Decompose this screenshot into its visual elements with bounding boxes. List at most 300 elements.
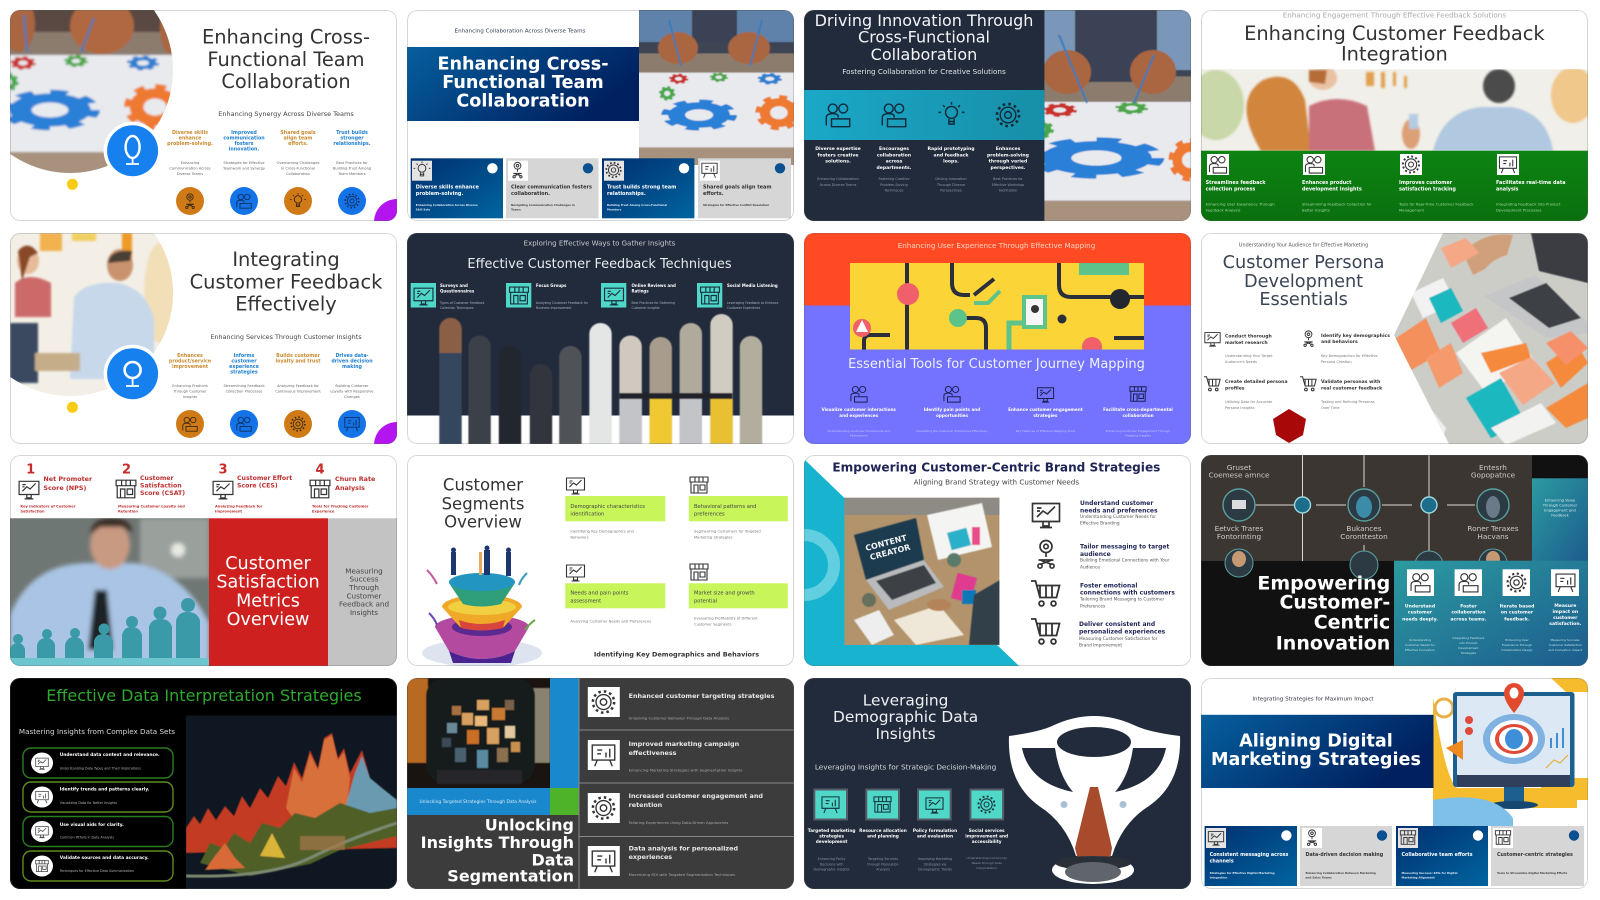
feature 1: Understanding	[1409, 638, 1431, 642]
metric 1: 1	[26, 462, 35, 478]
tile 2	[859, 789, 907, 871]
teal side panel: Feedback	[1551, 514, 1570, 518]
image: finger strips over laptop	[439, 314, 762, 458]
tile 1: Consistent messaging across	[1210, 852, 1289, 858]
heading: Unlocking	[485, 815, 574, 834]
tile 1: development	[816, 838, 847, 844]
bullet headings: fosters	[234, 141, 254, 147]
title band: Marketing Strategies	[1211, 750, 1421, 770]
bullet headings: Trust builds	[336, 130, 368, 136]
technique 4	[697, 282, 778, 310]
metric 4: Analysis	[335, 484, 365, 492]
feature 4: analysis	[1496, 187, 1519, 193]
bullet descriptions: Building Customer	[335, 384, 369, 388]
bullet descriptions: in Cross-Functional	[281, 166, 315, 170]
technique 3: Customer Insights	[632, 306, 660, 310]
bullet descriptions: Building Trust Among	[333, 166, 371, 170]
item 2: Key Demographics for Effective	[1321, 354, 1378, 358]
panel: slide 11 Empowering Customer-Centric Brand Strategies	[804, 455, 1191, 666]
title band: Aligning Digital	[1239, 731, 1393, 751]
feature 2	[1450, 569, 1487, 655]
strategy 2	[23, 782, 173, 812]
heading: Essential Tools for Customer Journey Mapping	[848, 356, 1145, 372]
technique 4: Social Media Listening	[727, 282, 778, 288]
small heading: Exploring Effective Ways to Gather Insights	[524, 239, 676, 247]
bullet headings: Enhances	[177, 352, 203, 358]
red title panel: Customer	[225, 554, 311, 574]
tile 4: Customer-centric strategies	[1497, 852, 1573, 858]
image: cylinder of data blocks	[407, 678, 550, 788]
feature 1: needs deeply.	[1402, 617, 1438, 623]
heading: Data	[531, 850, 574, 869]
grey subtitle panel: Success	[350, 575, 379, 584]
metric 3	[213, 462, 292, 513]
metric 1	[19, 462, 93, 513]
item 1: Understand customer	[1080, 500, 1153, 507]
heading: Insights	[876, 724, 936, 742]
bullet headings: problem-solving	[987, 152, 1029, 158]
image: org network board	[1201, 455, 1532, 579]
segment 1: Behaviors	[570, 535, 589, 539]
feature 3: Collaborative Design	[1501, 648, 1533, 652]
technique 3: Best Practices for Gathering	[632, 300, 675, 304]
purple corner circle	[374, 199, 420, 245]
tile 1	[411, 158, 503, 218]
heading: Functional Team	[207, 48, 365, 71]
tool 1: and experiences	[839, 412, 879, 418]
bullet descriptions: Enhancing Products	[172, 384, 208, 388]
tile 3: Building Trust Among Cross-Functional	[607, 203, 667, 207]
tile 3: Trust builds strong team	[607, 184, 676, 190]
bullet headings: efforts.	[288, 141, 308, 147]
feature 2: collaboration	[1451, 610, 1485, 616]
icon row	[176, 187, 366, 215]
bullet descriptions: Diverse Teams	[177, 172, 203, 176]
metric 4: Tools for Tracking Customer	[312, 504, 369, 508]
panel: slide 15 Leveraging Demographic Data Insights	[804, 678, 1191, 888]
panel: slide 10 Customer Segments Overview	[407, 455, 794, 666]
tile 1: channels	[1210, 858, 1234, 864]
feature 2: Development	[1458, 646, 1479, 650]
feature 1: Effective Innovation	[1405, 648, 1435, 652]
item 4: Validate personas with	[1321, 378, 1380, 384]
image: content creator desk: CONTENT	[864, 533, 908, 553]
tool 3: Key Features of Effective Mapping Tools	[1016, 428, 1076, 432]
metric 2: Retention	[118, 509, 138, 513]
feature 4: Development Processes	[1496, 208, 1542, 213]
segment 2: preferences	[694, 511, 725, 517]
segment 2: Segmenting Customers for Targeted	[694, 530, 761, 534]
feature 3: Iterate based	[1500, 603, 1534, 609]
item 4	[1031, 619, 1166, 649]
feature 1: Enhancing User Experience Through	[1206, 202, 1275, 207]
bullet headings: Builds customer	[276, 352, 320, 358]
segment 1: Identifying Key Demographics and	[570, 530, 634, 534]
teal feature panel	[1394, 561, 1588, 667]
title band	[1201, 714, 1434, 788]
bullet descriptions: Techniques	[884, 189, 904, 193]
strategy 4	[23, 850, 173, 880]
heading: Effective Customer Feedback Techniques	[467, 256, 732, 271]
feature 4: Integrating Feedback Into Product	[1496, 202, 1561, 207]
tile 3: Collaborative team efforts	[1402, 852, 1473, 858]
yellow dot	[67, 179, 78, 190]
row 3	[588, 792, 763, 824]
item 4	[1300, 376, 1383, 410]
feature 3: Enhancing User	[1505, 638, 1530, 642]
item 2: Tailor messaging to target	[1080, 543, 1169, 550]
feature 1: Customer Needs for	[1405, 643, 1436, 647]
technique 4: Leveraging Feedback to Enhance	[727, 300, 778, 304]
bullet headings: stronger	[340, 136, 364, 142]
tile 3	[1396, 826, 1488, 886]
segment 3	[565, 565, 665, 624]
bullet headings: Informs	[234, 352, 255, 358]
tile 3: Members	[607, 208, 622, 212]
teal triangle background	[774, 459, 1019, 666]
segment 4: Evaluating Profitability of Different	[694, 616, 758, 620]
tile 1: Decisions with	[820, 862, 843, 866]
heading: Segmentation	[447, 866, 574, 885]
tool 2: Visualizing the Customer Experience Effectively	[916, 428, 988, 432]
tile 2	[1300, 826, 1392, 886]
image: org network board: Bukances	[1346, 524, 1382, 533]
bullet descriptions: Best Practices for	[993, 177, 1023, 181]
panel: slide 6 Effective Customer Feedback Techniques	[407, 232, 794, 444]
subtitle: Leveraging Insights for Strategic Decision-Making	[815, 762, 996, 771]
feature 2: into Product	[1459, 641, 1478, 645]
row 2: effectiveness	[629, 748, 677, 756]
tile 4: Interpretation	[976, 866, 997, 870]
metric 4	[310, 462, 376, 513]
bullet descriptions: Strategies for Effective	[223, 161, 265, 165]
bullet headings: product/service	[169, 358, 212, 364]
item 2: and behaviors	[1321, 338, 1358, 344]
heading: Essentials	[1259, 290, 1348, 310]
bullet descriptions: Driving Innovation	[935, 177, 967, 181]
image: org network board: Gopopatnce	[1471, 471, 1516, 480]
blue column	[550, 678, 579, 788]
image: org network board: Coemese amnce	[1209, 471, 1270, 480]
image: org network board: Eetvck Trares	[1215, 524, 1264, 533]
title band: Enhancing Cross-	[437, 54, 609, 74]
item 4: Brand Improvement	[1079, 643, 1122, 649]
green square	[550, 788, 579, 814]
item 2	[1304, 330, 1390, 364]
feature 4	[1496, 154, 1566, 213]
technique 2: Business Improvement	[536, 306, 572, 310]
tile 1: Integration	[1210, 875, 1227, 879]
tool 1: Understanding Customer Touchpoints and	[827, 428, 890, 432]
tile 3: Improving Marketing	[918, 856, 952, 860]
metric 4: Churn Rate	[335, 475, 376, 483]
bullet headings: Drives data-	[335, 352, 369, 358]
technique 1	[411, 282, 485, 310]
bullet descriptions: Through Customer	[172, 389, 207, 393]
row 1: Enhanced customer targeting strategies	[629, 692, 775, 700]
item 4: personalized experiences	[1079, 629, 1166, 636]
item 4: Deliver consistent and	[1079, 621, 1155, 628]
bullet headings: Rapid prototyping	[927, 146, 975, 152]
technique 2: Focus Groups	[536, 282, 567, 288]
bullet descriptions: Communication Across	[169, 166, 211, 170]
image: content creator desk: CREATOR	[869, 543, 911, 562]
tool 4	[1103, 386, 1173, 437]
image: gears on paper in circle	[10, 10, 173, 173]
tool 3	[1008, 387, 1083, 432]
panel: slide 4 Enhancing Customer Feedback Integration	[1201, 10, 1588, 221]
row 2	[588, 740, 742, 772]
metric 2: Score (CSAT)	[140, 490, 185, 497]
heading: Insights Through	[421, 832, 574, 852]
bullet descriptions: Team Members	[337, 172, 366, 176]
metric 3: Analyzing Feedback for	[215, 504, 263, 508]
tile 3: relationships.	[607, 191, 646, 197]
feature 4	[1548, 569, 1583, 652]
tile 2: collaboration.	[511, 191, 550, 197]
bullet descriptions	[172, 384, 374, 398]
image: org network board: Roner Teraxes	[1467, 524, 1519, 533]
panel: slide 1 Enhancing Cross-Functional Team Collaboration	[10, 10, 397, 221]
row 4: experiences	[629, 852, 672, 860]
image: org network board: Corontteston	[1340, 532, 1388, 541]
strategy 1: Understanding Data Types and Their Implications	[60, 766, 141, 770]
segment 4: Customer Segments	[694, 623, 732, 627]
subtitle: Enhancing Services Through Customer Insights	[210, 332, 362, 340]
heading: Customer Feedback	[190, 270, 383, 293]
feature 2: Streamlining Feedback Collection for	[1302, 202, 1372, 207]
feature 4: Facilitates real-time data	[1496, 180, 1566, 186]
tile 3: Marketing Alignment	[1402, 875, 1435, 879]
tool 1	[821, 386, 896, 437]
feature 3	[1500, 569, 1534, 652]
tile 2: Clear communication fosters	[511, 184, 592, 190]
bullet descriptions: Streamlining Feedback	[223, 384, 265, 388]
panel: slide 7 Essential Tools for Customer Journey Mapping	[804, 232, 1191, 444]
image: gears on paper	[639, 10, 794, 165]
metric 2: Measuring Customer Loyalty and	[118, 504, 185, 508]
feature 4: customer	[1553, 615, 1578, 621]
bullet headings: Shared goals	[280, 130, 316, 136]
purple corner circle	[374, 422, 420, 468]
tile 4: Needs through Data	[972, 860, 1002, 864]
panel: slide 3 Driving Innovation	[804, 10, 1191, 221]
bullet descriptions: Continuous Improvement	[275, 389, 321, 393]
teal side panel: Through Customer	[1542, 504, 1578, 508]
segment 3: Analyzing Customer Needs and Preferences	[570, 620, 651, 624]
feature 2: Foster	[1460, 603, 1477, 609]
bullet headings: departments.	[876, 165, 912, 171]
metric 2: Customer	[140, 475, 174, 482]
heading: Customer	[443, 476, 523, 495]
bullet headings: innovation.	[229, 146, 259, 152]
bullet headings: perspectives.	[991, 165, 1026, 171]
grey subtitle panel: Measuring	[345, 566, 383, 575]
technique 2: Analyzing Customer Feedback for	[536, 300, 589, 304]
bullet headings: Encourages	[879, 146, 909, 152]
segment 3: assessment	[570, 598, 601, 604]
tool 1: Interactions	[850, 433, 868, 437]
feature 4: impact on	[1552, 609, 1578, 615]
tile 4: improvement and	[965, 833, 1008, 839]
feature 3: satisfaction tracking	[1399, 187, 1456, 193]
bullet headings: customer	[231, 358, 257, 364]
panel: slide 12 Empowering Customer-Centric Innovation	[1201, 455, 1588, 666]
small heading: Understanding Your Audience for Effective Marketing	[1239, 242, 1368, 248]
tile 4	[1491, 826, 1584, 886]
bullet descriptions: Facilitation	[999, 189, 1017, 193]
heading: Effective Data Interpretation Strategies	[46, 686, 362, 704]
bullet headings: align team	[284, 136, 312, 142]
tile 2: Enhancing Collaboration Between Marketing	[1306, 870, 1376, 874]
tool 1: Visualize customer interactions	[821, 406, 896, 412]
technique 2	[506, 282, 589, 310]
heading: Leveraging	[863, 691, 948, 709]
bullet descriptions: Across Diverse Teams	[820, 183, 857, 187]
item 4: Testing and Refining Personas	[1320, 400, 1375, 404]
feature 3: Management	[1399, 208, 1425, 213]
panel: slide 9 Customer Satisfaction Metrics Overview	[10, 455, 397, 666]
bullet descriptions: Collection Processes	[226, 389, 262, 393]
row 2: Enhancing Marketing Strategies with Segmentation Insights	[629, 767, 742, 772]
bullet headings: collaboration	[877, 152, 911, 158]
item 4: Measuring Customer Satisfaction for	[1079, 636, 1158, 642]
bullet headings: problem-solving.	[167, 141, 213, 147]
feature 4: satisfaction.	[1549, 621, 1582, 627]
row 1: Unlocking Customer Behavior Through Data Analysis	[629, 715, 729, 720]
metric 3: Score (CES)	[237, 482, 278, 490]
heading: Integration	[1341, 43, 1448, 66]
title band: Collaboration	[456, 92, 590, 112]
tile 4: accessibility	[972, 838, 1002, 844]
bullet descriptions: Changes	[344, 394, 360, 398]
metric 3: Improvement	[215, 509, 242, 513]
red title panel	[209, 518, 328, 666]
heading: Overview	[444, 512, 522, 531]
tool 3: Enhance customer engagement	[1008, 406, 1083, 412]
tile 3: Demographic Trends	[918, 867, 952, 871]
row 4	[588, 844, 738, 876]
image: org network board: Gruset	[1227, 463, 1251, 472]
tile 1: Targeted marketing	[808, 828, 855, 834]
red title panel: Metrics	[236, 592, 300, 612]
heading: Empowering Customer-Centric Brand Strategies	[832, 461, 1160, 475]
bullet descriptions	[169, 161, 371, 176]
panel: slide 13 Effective Data Interpretation Strategies	[10, 678, 397, 888]
feature 1: Feedback Analysis	[1206, 208, 1241, 213]
heading: Customer-	[1279, 591, 1390, 613]
small heading: Enhancing User Experience Through Effective Mapping	[898, 240, 1095, 250]
technique 1: Types of Customer Feedback	[439, 300, 485, 304]
bullet headings: enhance	[179, 136, 202, 142]
strategy 1	[23, 748, 173, 778]
tool 2	[916, 386, 988, 432]
heading: Collaboration	[871, 45, 977, 64]
item 1: Audience's Needs	[1225, 360, 1257, 364]
tile 1: Diverse skills enhance	[416, 184, 479, 190]
feature 4: and Innovation Impact	[1548, 648, 1583, 652]
bullet descriptions: Effective Workshop	[992, 183, 1024, 187]
segment 2: Behavioral patterns and	[694, 504, 756, 510]
image: watercolor people in circle	[10, 233, 173, 396]
bullet descriptions: Overcoming Challenges	[277, 161, 320, 165]
heading: Driving Innovation Through	[815, 11, 1033, 30]
image: man with growth figures	[10, 518, 209, 668]
feature 3	[1398, 154, 1474, 213]
segment 1: Demographic characteristics	[570, 504, 645, 510]
bullet descriptions: Fostering Creative	[878, 177, 910, 181]
technique 3: Ratings	[632, 288, 649, 293]
bullet descriptions: Loyalty with Responsive	[330, 389, 374, 393]
bullet headings: loops.	[943, 159, 959, 165]
image: yellow road map illustration	[850, 262, 1145, 358]
bullet descriptions: Perspectives	[940, 189, 962, 193]
tile 1	[808, 789, 855, 871]
heading: Cross-Functional	[858, 28, 990, 47]
feature 1: customer	[1408, 610, 1433, 616]
subtitle: Enhancing Synergy Across Diverse Teams	[218, 110, 354, 118]
feature 3: Improves customer	[1399, 180, 1453, 186]
tile 3: Measuring Success: KPIs for Digital	[1402, 870, 1458, 874]
image: org network board: Entesrh	[1479, 463, 1507, 472]
row 3: Increased customer engagement and	[629, 792, 763, 800]
metric 1: Satisfaction	[20, 509, 45, 513]
item 3: Create detailed persona	[1225, 378, 1288, 384]
bullet headings: across	[886, 159, 903, 165]
tile 1: strategies	[819, 833, 844, 839]
small heading: Integrating Strategies for Maximum Impact	[1252, 696, 1374, 702]
bullet headings: experience	[229, 364, 260, 370]
item 4: real customer feedback	[1321, 385, 1383, 391]
feature 1: Understand	[1405, 603, 1435, 609]
segment 4: potential	[694, 598, 717, 604]
grey subtitle panel: Customer	[347, 592, 381, 600]
tile 1: Demographic Insights	[814, 867, 850, 871]
blue band with tagline	[407, 788, 550, 814]
item 1	[1032, 500, 1158, 528]
bullet headings: through varied	[989, 159, 1027, 165]
image: org network board: Fontorinting	[1217, 532, 1261, 541]
strategy 2: Identify trends and patterns clearly.	[60, 786, 150, 792]
technique 1: Collection Techniques	[440, 306, 474, 310]
image: watercolor people	[1188, 66, 1595, 151]
title band: Functional Team	[442, 73, 604, 93]
metric 2	[116, 462, 185, 513]
bullet headings: fosters creative	[818, 152, 858, 158]
metric 4: 4	[315, 462, 325, 478]
row 3: Tailoring Experiences Using Data-Driven Approaches	[628, 820, 728, 824]
tile 2: Targeting Services	[867, 856, 898, 860]
item 3: Foster emotional	[1080, 582, 1137, 589]
title band	[407, 47, 639, 121]
bullet headings: making	[342, 364, 363, 370]
bullet headings: Improved	[231, 130, 257, 136]
tool 4: Enhancing Customer Engagement Through	[1106, 428, 1170, 432]
bullet descriptions: Analyzing Feedback for	[277, 384, 319, 388]
bullet descriptions: Insights	[183, 394, 197, 398]
feature 2: Better Insights	[1302, 208, 1330, 213]
item 3	[1031, 581, 1175, 609]
item 3	[1204, 376, 1288, 410]
tile 2: and Sales Teams	[1306, 875, 1332, 879]
image: 3D mountain data chart	[186, 714, 397, 890]
heading: Centric	[1314, 611, 1390, 633]
subtitle: Fostering Collaboration for Creative Solutions	[842, 67, 1006, 76]
segment 1	[565, 478, 665, 539]
image: org network board: Hacvans	[1477, 532, 1509, 541]
metric 2: Satisfaction	[140, 482, 182, 490]
icon row	[176, 410, 366, 438]
